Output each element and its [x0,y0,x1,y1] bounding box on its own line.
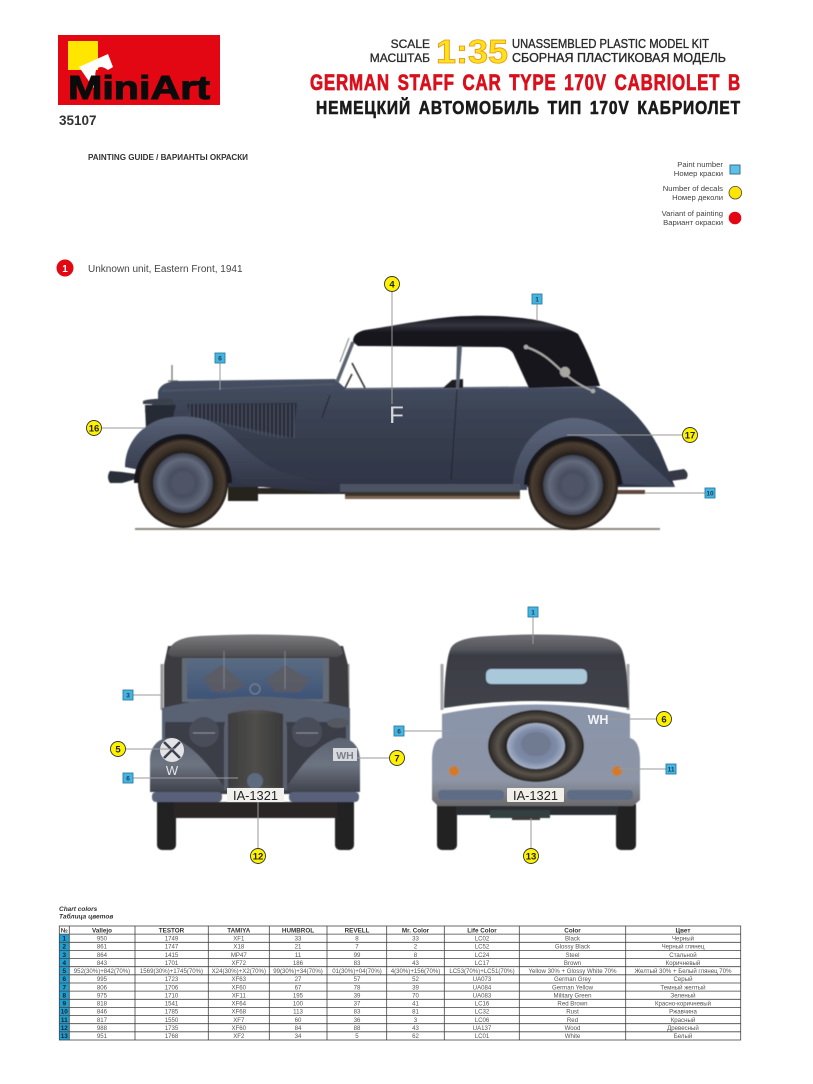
callout 16: 16 [89,424,99,434]
row numbers [61,936,68,1040]
table header [61,927,690,934]
paint tag 6 [394,726,404,736]
row numbers: 12 [61,1025,68,1032]
chart colors heading: Chart colors [59,906,98,913]
table rows: 975 [97,992,108,1000]
hinge [526,347,593,391]
table rows: Yellow 30% + Glossy White 70% [528,968,617,975]
table rows: 5 [355,1033,359,1040]
table rows: 818 [97,1001,108,1008]
table rows: 43 [412,960,419,967]
grille shell [224,701,287,790]
table rows: Wood [565,1025,580,1032]
table rows: 34 [295,1033,302,1040]
paint tag 3 [123,690,133,700]
table rows: XF7 [233,1017,245,1024]
chassis [174,802,337,818]
table rows: 1747 [165,944,179,951]
table rows: XF60 [232,984,247,991]
row numbers: 2 [63,944,67,951]
kit type label: UNASSEMBLED PLASTIC MODEL KIT [512,37,709,51]
table rows: 806 [97,984,108,991]
table rows: XF72 [232,960,247,967]
windshield frame [182,658,329,702]
row numbers: 7 [63,984,67,991]
hub cap [247,773,263,789]
table rows: XF1 [233,936,245,942]
table rows: LC01 [475,1033,490,1040]
table rows: 62 [412,1033,419,1040]
table rows: Steel [566,952,579,959]
rear bumper [658,469,688,481]
scale label: МАСШТАБ [370,51,430,65]
table rows: 41 [412,1001,419,1008]
roof [353,316,600,388]
table rows: 1706 [165,984,179,991]
table rows: X24(30%)+X2(70%) [212,968,266,975]
WH plate: WH [336,750,354,762]
table rows: LC02 [475,936,490,942]
logo: MiniArt: MiniArt [68,69,210,106]
table rows: Черный глянец [662,944,705,951]
table rows: 78 [354,984,361,991]
windshield [187,659,323,699]
table rows: 195 [293,992,304,1000]
front fender [125,416,340,494]
sill [340,484,520,492]
table rows: 846 [97,1009,108,1016]
tail lamps [449,766,459,776]
bumpers [152,792,222,802]
steering and seat [345,363,365,388]
table rows: UA084 [473,984,492,991]
row numbers: 4 [63,960,67,967]
table rows: 995 [97,976,108,983]
table header: № [61,927,68,934]
table rows: Red Brown [557,1001,588,1008]
table rows: 70 [412,992,419,1000]
license plate: IA-1321 [513,788,558,803]
table rows: 84 [295,1025,302,1032]
paint tag 11: 11 [668,766,675,774]
table rows: 1723 [165,976,179,983]
legend: Number of decals [663,184,723,193]
table header: Vallejo [92,927,112,934]
ground shadow [135,528,660,530]
table rows: 11 [295,952,302,959]
table rows: 7 [355,944,359,951]
soft top [444,634,629,708]
table rows: 81 [412,1009,419,1016]
table rows: 1710 [165,992,179,1000]
paint tag 11 [666,764,676,774]
table rows: Стальной [669,952,697,959]
undercarriage [456,805,618,815]
table rows: 843 [97,960,108,967]
door lines [322,390,457,480]
mirrors [162,664,348,710]
table rows: XF2 [233,1033,245,1040]
table rows: Glossy Black [555,944,591,951]
table header: Life Color [467,927,497,934]
table rows: 33 [412,936,419,942]
table header: TESTOR [159,927,185,934]
table rows: XF63 [232,976,247,983]
table rows: 8 [414,952,418,959]
table rows: 988 [97,1025,108,1032]
main body [145,379,675,487]
table rows: 33 [295,936,302,942]
table rows: 817 [97,1017,108,1024]
painting guide heading: PAINTING GUIDE / ВАРИАНТЫ ОКРАСКИ [88,153,248,162]
row numbers: 13 [61,1033,68,1040]
table rows: LC16 [475,1001,490,1008]
chassis [228,486,645,501]
table rows: 864 [97,952,108,959]
callout 12 [250,848,266,864]
table rows: Красно-коричневый [655,1001,711,1008]
table rows: German Yellow [552,984,594,991]
legend [662,160,742,227]
table rows: 37 [354,1001,361,1008]
grille [228,710,283,788]
number column fill [60,934,70,1040]
leader lines [126,695,389,848]
paint tag 6: 6 [126,776,130,782]
table rows: 43 [412,1025,419,1032]
headlights [189,717,219,747]
table rows: LC06 [475,1017,490,1024]
table rows: Темный желтый [660,984,706,991]
row numbers: 6 [63,976,67,983]
radiator and headlight [145,405,176,430]
paint tag 3: 3 [126,692,130,700]
tires [157,796,176,850]
legend: Номер краски [674,169,723,178]
title russian: НЕМЕЦКИЙ АВТОМОБИЛЬ ТИП 170V КАБРИОЛЕТ [316,97,741,118]
table rows: Rust [566,1009,579,1016]
callout 12: 12 [253,852,263,862]
table rows: 1701 [165,960,179,967]
WH plate [333,748,357,762]
paint tag 1 [528,607,538,617]
row numbers: 5 [63,968,67,975]
table header: REVELL [345,927,370,934]
b pillar [456,346,462,389]
table rows: LC24 [475,952,490,959]
table rows: 88 [354,1025,361,1032]
table rows: Red [567,1017,578,1024]
table rows: 36 [354,1017,361,1024]
front bumper [108,471,136,483]
leader lines [102,292,705,493]
table rows: 99(30%)+34(70%) [273,968,323,975]
table rows: Ржавчина [669,1009,698,1016]
scale label: SCALE [391,37,430,51]
table rows: XF64 [232,1001,247,1008]
table rows: UA137 [473,1025,492,1032]
front wheel [134,434,232,483]
fenders [150,738,228,792]
table rows: White [565,1033,581,1040]
table rows: 99 [354,952,361,959]
louvres [187,403,297,438]
callout 16 [86,420,102,436]
chart colors heading: Таблица цветов [59,912,113,920]
belt line highlight [345,387,595,389]
paint tag 10 [705,488,715,498]
callout 13 [524,848,538,864]
table rows: 1768 [165,1033,179,1040]
table rows [74,936,732,1040]
table rows: 83 [354,1009,361,1016]
kit type label: СБОРНАЯ ПЛАСТИКОВАЯ МОДЕЛЬ [512,51,726,65]
color table [59,926,741,1040]
callout 4 [384,276,400,292]
table rows: XF11 [232,992,246,1000]
table rows: Brown [564,960,581,967]
paint tag 10: 10 [706,490,714,498]
balkenkreuz [160,738,184,762]
table rows: UA073 [473,976,492,983]
table rows: LC32 [475,1009,490,1016]
table rows: 186 [293,960,304,967]
door letter F: F [389,402,404,429]
table rows: LC53(70%)+LC51(70%) [449,968,515,975]
tires [437,800,457,850]
kit number: 35107 [59,113,97,128]
WH marking: WH [588,713,608,727]
table rows: 1569(30%)+1745(70%) [140,968,203,975]
mirror [327,718,349,728]
license plate: IA-1321 [233,788,278,803]
table rows: X18 [233,944,245,951]
table rows: 27 [295,976,302,983]
variant badge [56,260,74,276]
table rows: 950 [97,936,108,942]
table rows: 113 [293,1009,303,1016]
table rows: 1785 [165,1009,179,1016]
table rows: 3 [414,1017,418,1024]
row numbers: 1 [63,936,67,942]
rear fender [513,418,675,490]
table rows: Зеленый [671,992,695,1000]
table rows: Black [565,936,581,942]
table rows: 1541 [165,1001,179,1008]
table rows: 21 [295,944,302,951]
paint tag 6: 6 [397,728,401,736]
paint tag 6 [123,773,133,783]
legend: Вариант окраски [663,218,723,227]
table rows: Белый [674,1033,692,1040]
table header: Mr. Color [402,927,430,934]
leader lines [404,617,666,848]
body [432,704,640,806]
callout 5: 5 [115,744,121,756]
table header: Color [564,927,581,934]
table rows: 01(30%)+04(70%) [332,968,382,975]
table rows: Серый [674,976,692,983]
side view car [86,276,715,530]
wiper rods [224,651,285,689]
row numbers: 3 [63,952,67,959]
callout 17 [682,428,698,442]
table rows: LC17 [475,960,490,967]
paint tag 1 [532,294,542,304]
table rows: 4(30%)+156(70%) [391,968,440,975]
paint tag 1: 1 [535,296,539,304]
table rows: Military Green [554,992,591,1000]
table rows: 57 [354,976,361,983]
table rows: UA083 [473,992,492,1000]
table rows: Древесный [667,1025,699,1032]
variant badge: 1 [62,264,68,275]
table rows: 861 [97,944,108,951]
table rows: German Grey [554,976,592,983]
cab sides [164,646,349,712]
legend: Номер деколи [672,193,723,202]
rear view car [394,607,676,864]
table rows: LC52 [475,944,490,951]
roof [168,634,343,657]
table header: TAMIYA [227,927,251,934]
rear window [486,669,587,684]
star [250,684,260,694]
table rows: XF60 [232,1025,247,1032]
callout 13: 13 [526,852,536,862]
paint tag 6: 6 [218,356,222,362]
callout 6: 6 [661,714,667,726]
legend: Variant of painting [662,209,723,218]
callout 7: 7 [394,754,400,764]
table rows: 951 [97,1033,108,1040]
table rows: 1749 [165,936,179,942]
table rows: Красный [671,1017,695,1024]
spare tire [488,710,584,782]
callout 5 [110,742,126,756]
mirrors [442,664,628,710]
table header: HUMBROL [282,927,314,934]
table rows: Желтый 30% + Белый глянец 70% [634,968,732,975]
table rows: Коричневый [666,960,700,967]
table rows: 952(30%)+842(70%) [74,968,130,975]
paint tag 1: 1 [531,610,535,616]
dark recess behind grille [165,722,346,794]
chart colors heading [59,906,113,920]
scale label [370,37,430,65]
kit type label [512,37,726,65]
row numbers: 11 [61,1017,68,1024]
paint tag 6 [215,353,225,363]
rear wheel [524,436,622,485]
table rows: MP47 [231,952,247,959]
legend: Paint number [677,160,723,169]
bumpers [438,790,504,800]
table rows: 8 [355,936,359,942]
letter W: W [166,763,179,778]
table rows: 60 [295,1017,302,1024]
table rows: 67 [295,984,302,991]
table rows: XF68 [232,1009,247,1016]
table header: Цвет [676,927,690,934]
table rows: 52 [412,976,419,983]
table rows: 39 [354,992,361,1000]
table rows: 100 [293,1001,304,1008]
callout 6 [656,712,672,726]
cowl [162,696,350,760]
table rows: 83 [354,960,361,967]
table rows: 39 [412,984,419,991]
row numbers: 8 [63,992,67,1000]
table rows: 1550 [165,1017,179,1024]
table rows: Черный [672,936,694,942]
table rows: 2 [414,944,418,951]
callout 17: 17 [685,430,695,442]
row numbers: 9 [63,1001,67,1008]
scale 1:35: 1:35 [436,33,508,70]
table rows: 1415 [165,952,179,959]
row numbers: 10 [61,1009,68,1016]
variant caption: Unknown unit, Eastern Front, 1941 [88,264,243,275]
table rows: 1735 [165,1025,179,1032]
front view car [110,634,404,864]
hood ornament [168,365,178,382]
logo: MiniArt [58,35,220,106]
callout 7 [390,750,404,766]
callout 4: 4 [389,280,395,290]
windscreen pillar [337,342,353,382]
